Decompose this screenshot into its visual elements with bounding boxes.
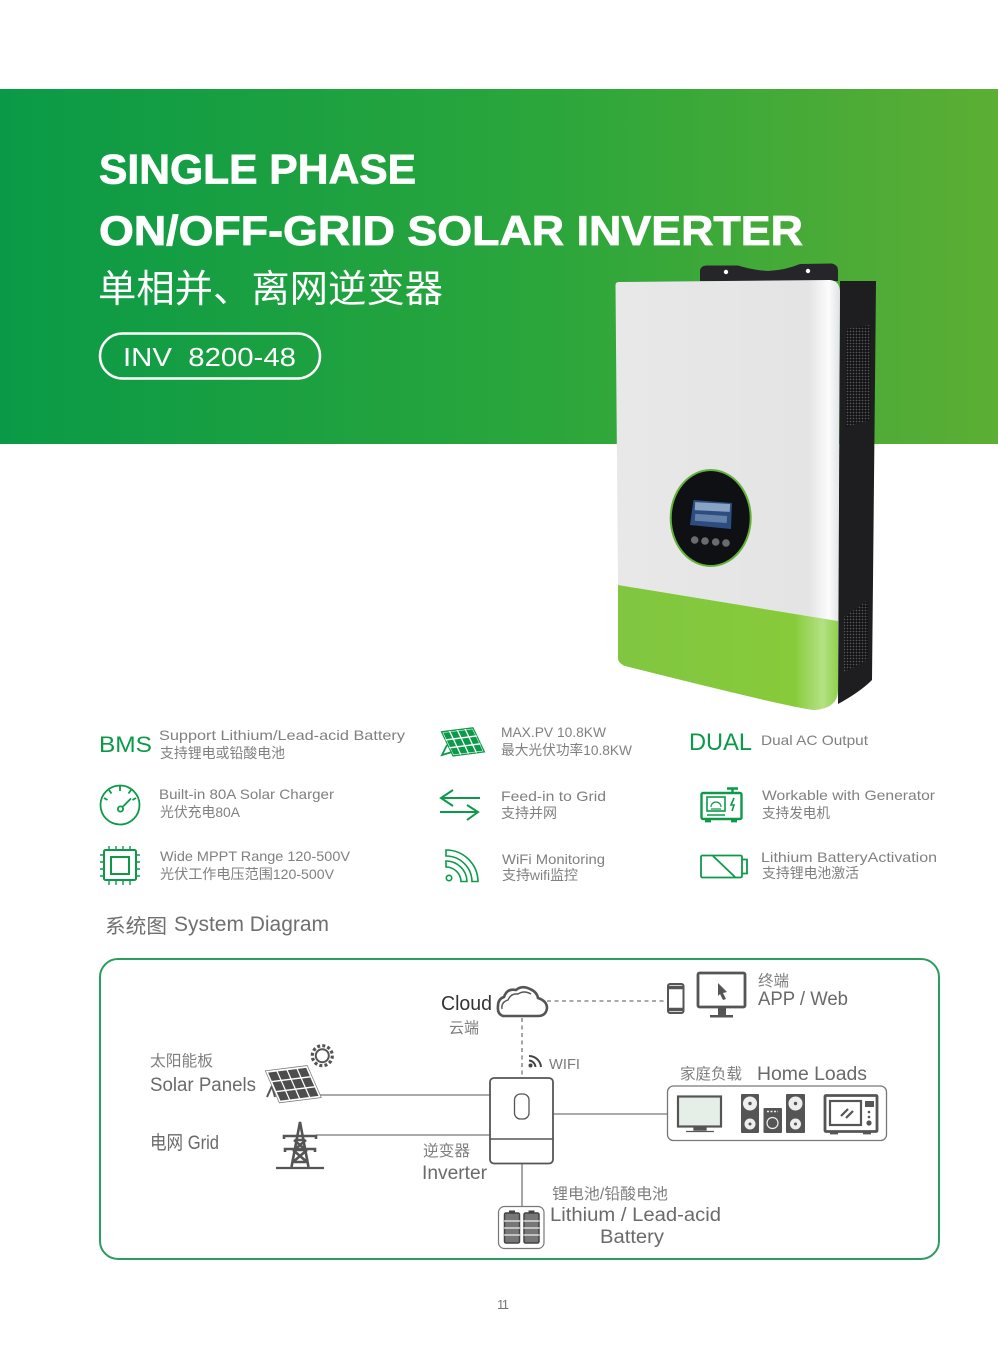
home loads label: 家庭负载 bbox=[680, 1065, 742, 1083]
feature: dual output: DUAL bbox=[689, 729, 752, 756]
feature: feed-in: Feed-in to Grid bbox=[501, 788, 606, 804]
label: terminal: APP / Web bbox=[758, 989, 848, 1010]
feature: max PV: 最大光伏功率10.8KW bbox=[501, 742, 633, 758]
home loads box bbox=[668, 1086, 886, 1140]
black side bbox=[838, 281, 876, 704]
feature: MPPT: 光伏工作电压范围120-500V bbox=[160, 866, 335, 882]
icon: chip bbox=[100, 846, 140, 885]
icon: wifi bbox=[446, 850, 478, 882]
solar panels label bbox=[150, 1052, 256, 1096]
display circle bbox=[671, 470, 751, 566]
label: WiFi bbox=[528, 1056, 580, 1073]
feature: BMS: Support Lithium/Lead-acid Battery bbox=[159, 727, 405, 743]
feature: max PV bbox=[441, 724, 633, 758]
icon: battery pack bbox=[498, 1206, 544, 1248]
icon: TV bbox=[678, 1096, 721, 1132]
feature: dual output: Dual AC Output bbox=[761, 732, 868, 748]
product: inverter photo bbox=[616, 264, 876, 710]
home loads label: Home Loads bbox=[757, 1064, 867, 1085]
label: cloud bbox=[441, 993, 492, 1037]
label: WiFi: WIFI bbox=[549, 1056, 580, 1073]
icon: speakers bbox=[741, 1094, 805, 1133]
white front bbox=[616, 280, 840, 621]
solar panels label: Solar Panels bbox=[150, 1075, 256, 1096]
mounting bracket bbox=[700, 264, 838, 281]
feature: WiFi: WiFi Monitoring bbox=[502, 851, 605, 867]
feature: dual output bbox=[689, 729, 868, 756]
battery label bbox=[550, 1185, 721, 1248]
page number: 11 bbox=[497, 1297, 509, 1312]
battery label: Lithium / Lead-acid bbox=[550, 1205, 721, 1226]
feature: generator bbox=[702, 787, 935, 821]
grid label: 电网 Grid bbox=[150, 1132, 219, 1154]
home loads label bbox=[680, 1064, 867, 1085]
icon: generator bbox=[702, 788, 742, 821]
feature: MPPT: Wide MPPT Range 120-500V bbox=[160, 848, 351, 864]
label: cloud: Cloud bbox=[441, 993, 492, 1015]
feature: BMS: 支持锂电或铅酸电池 bbox=[160, 745, 285, 761]
feature: solar charger: Built-in 80A Solar Charger bbox=[159, 786, 334, 802]
model pill: INV 8200-48 bbox=[123, 342, 296, 372]
icon: exchange arrows bbox=[440, 790, 480, 820]
feature: MPPT bbox=[100, 846, 351, 885]
feature: battery activation: 支持锂电池激活 bbox=[762, 865, 859, 881]
icon: inverter unit bbox=[490, 1078, 553, 1164]
icon: solar panel bbox=[265, 1066, 321, 1103]
feature: battery activation: Lithium BatteryActivation bbox=[761, 849, 937, 865]
icon: solar panel bbox=[441, 727, 485, 757]
feature: solar charger bbox=[100, 786, 334, 824]
icon: sun gear bbox=[312, 1046, 332, 1066]
feature: WiFi: 支持wifi监控 bbox=[502, 867, 578, 883]
icon: microwave bbox=[825, 1096, 877, 1133]
title: ON/OFF-GRID SOLAR INVERTER bbox=[99, 207, 803, 254]
heading: system diagram bbox=[105, 913, 329, 938]
title: SINGLE PHASE bbox=[99, 146, 416, 192]
title: 单相并、离网逆变器 bbox=[98, 269, 443, 311]
inverter label: 逆变器 bbox=[423, 1142, 470, 1160]
icon: pylon bbox=[276, 1122, 324, 1168]
battery label: 锂电池/铅酸电池 bbox=[552, 1185, 668, 1203]
feature: max PV: MAX.PV 10.8KW bbox=[501, 724, 607, 740]
feature: feed-in: 支持并网 bbox=[501, 805, 557, 821]
feature: battery activation bbox=[701, 849, 937, 881]
feature: WiFi bbox=[446, 850, 605, 883]
icon: cloud bbox=[498, 987, 547, 1016]
green base bbox=[618, 585, 838, 710]
icon: phone bbox=[668, 984, 684, 1013]
inverter label bbox=[422, 1142, 488, 1184]
panel: system diagram bbox=[100, 959, 939, 1259]
battery label: Battery bbox=[600, 1227, 665, 1248]
feature: generator: Workable with Generator bbox=[762, 787, 935, 803]
icon: monitor bbox=[698, 973, 745, 1018]
icon: battery bbox=[701, 856, 747, 878]
feature: generator: 支持发电机 bbox=[762, 805, 830, 821]
heading: system diagram: 系统图 bbox=[105, 915, 167, 938]
feature: solar charger: 光伏充电80A bbox=[160, 804, 241, 820]
model pill bbox=[100, 334, 320, 378]
label: terminal bbox=[758, 972, 848, 1010]
label: terminal: 终端 bbox=[758, 972, 789, 990]
heading: system diagram: System Diagram bbox=[174, 913, 329, 936]
icon: gauge bbox=[100, 786, 140, 824]
inverter label: Inverter bbox=[422, 1163, 488, 1184]
feature: BMS: BMS bbox=[99, 732, 152, 757]
feature: feed-in bbox=[440, 788, 606, 821]
solar panels label: 太阳能板 bbox=[150, 1052, 213, 1070]
label: cloud: 云端 bbox=[449, 1019, 479, 1037]
feature: BMS bbox=[99, 727, 405, 761]
connection lines bbox=[316, 1001, 668, 1207]
green header band bbox=[0, 89, 998, 444]
title bbox=[98, 146, 803, 311]
